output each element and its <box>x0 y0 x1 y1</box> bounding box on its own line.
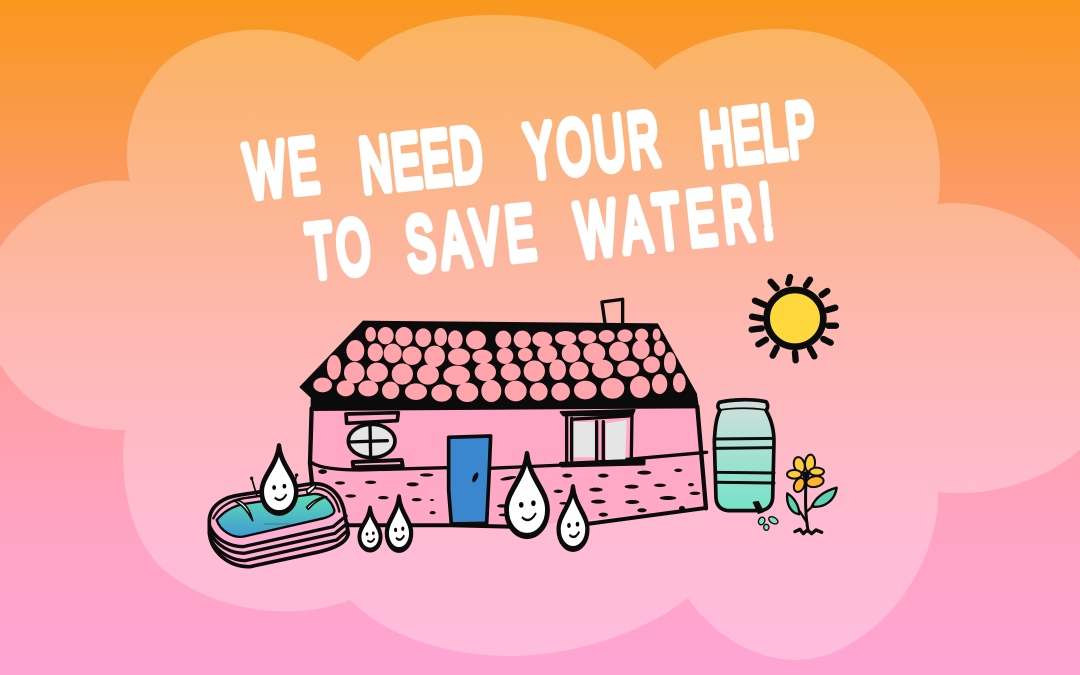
icon: sun <box>752 277 836 360</box>
paddling pool <box>209 473 348 567</box>
droplets from tap <box>757 515 779 530</box>
large water drop character <box>507 454 547 536</box>
rectangular window <box>561 410 644 466</box>
title <box>241 87 819 295</box>
flower <box>787 454 837 534</box>
ground line <box>347 508 703 527</box>
title: YOUR <box>521 96 663 195</box>
title: HELP <box>697 87 819 183</box>
chimney <box>602 299 623 325</box>
round window <box>346 413 403 467</box>
title: TO <box>303 204 374 295</box>
water butt <box>714 400 779 530</box>
water splashes <box>233 484 327 521</box>
pool water <box>217 494 334 537</box>
stone dashes <box>318 469 700 517</box>
title: SAVE <box>402 190 539 288</box>
roof <box>301 322 698 410</box>
title: WATER! <box>572 169 777 274</box>
walls <box>310 407 706 508</box>
title: WE <box>241 123 322 215</box>
medium water drop character <box>559 487 587 549</box>
title: NEED <box>356 112 486 209</box>
wall fill <box>312 407 706 527</box>
house <box>301 299 707 527</box>
water drop character in pool <box>262 446 296 513</box>
wall base band <box>312 452 707 470</box>
small water drop character 2 <box>387 497 411 550</box>
small water drop character 1 <box>359 508 381 550</box>
door <box>449 436 491 524</box>
